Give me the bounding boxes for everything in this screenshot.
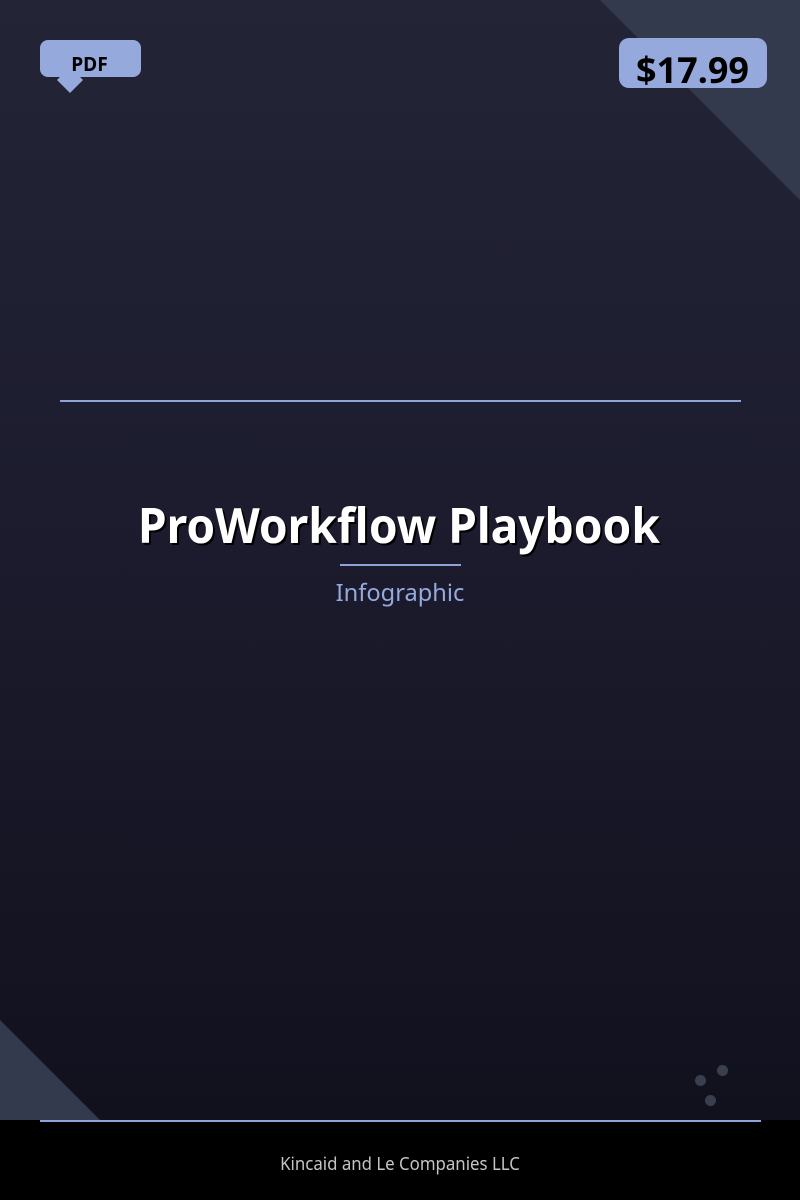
footer company name: Kincaid and Le Companies LLC (280, 1152, 520, 1176)
footer band (0, 1120, 800, 1200)
footer rule (40, 1120, 761, 1122)
title: ProWorkflow Playbook (138, 493, 660, 558)
upper divider (60, 400, 741, 402)
badge pointer (57, 77, 83, 93)
badge label: PDF (71, 50, 108, 77)
decorative dots (695, 1065, 728, 1106)
decorative corner: top right triangle (600, 0, 800, 200)
title underline (340, 564, 461, 566)
decorative corner: bottom left triangle (0, 1020, 100, 1120)
PDF badge (40, 40, 141, 93)
price: $17.99 (636, 45, 749, 94)
subtitle: Infographic (336, 576, 464, 609)
badge body (40, 40, 141, 77)
price badge (619, 38, 767, 88)
